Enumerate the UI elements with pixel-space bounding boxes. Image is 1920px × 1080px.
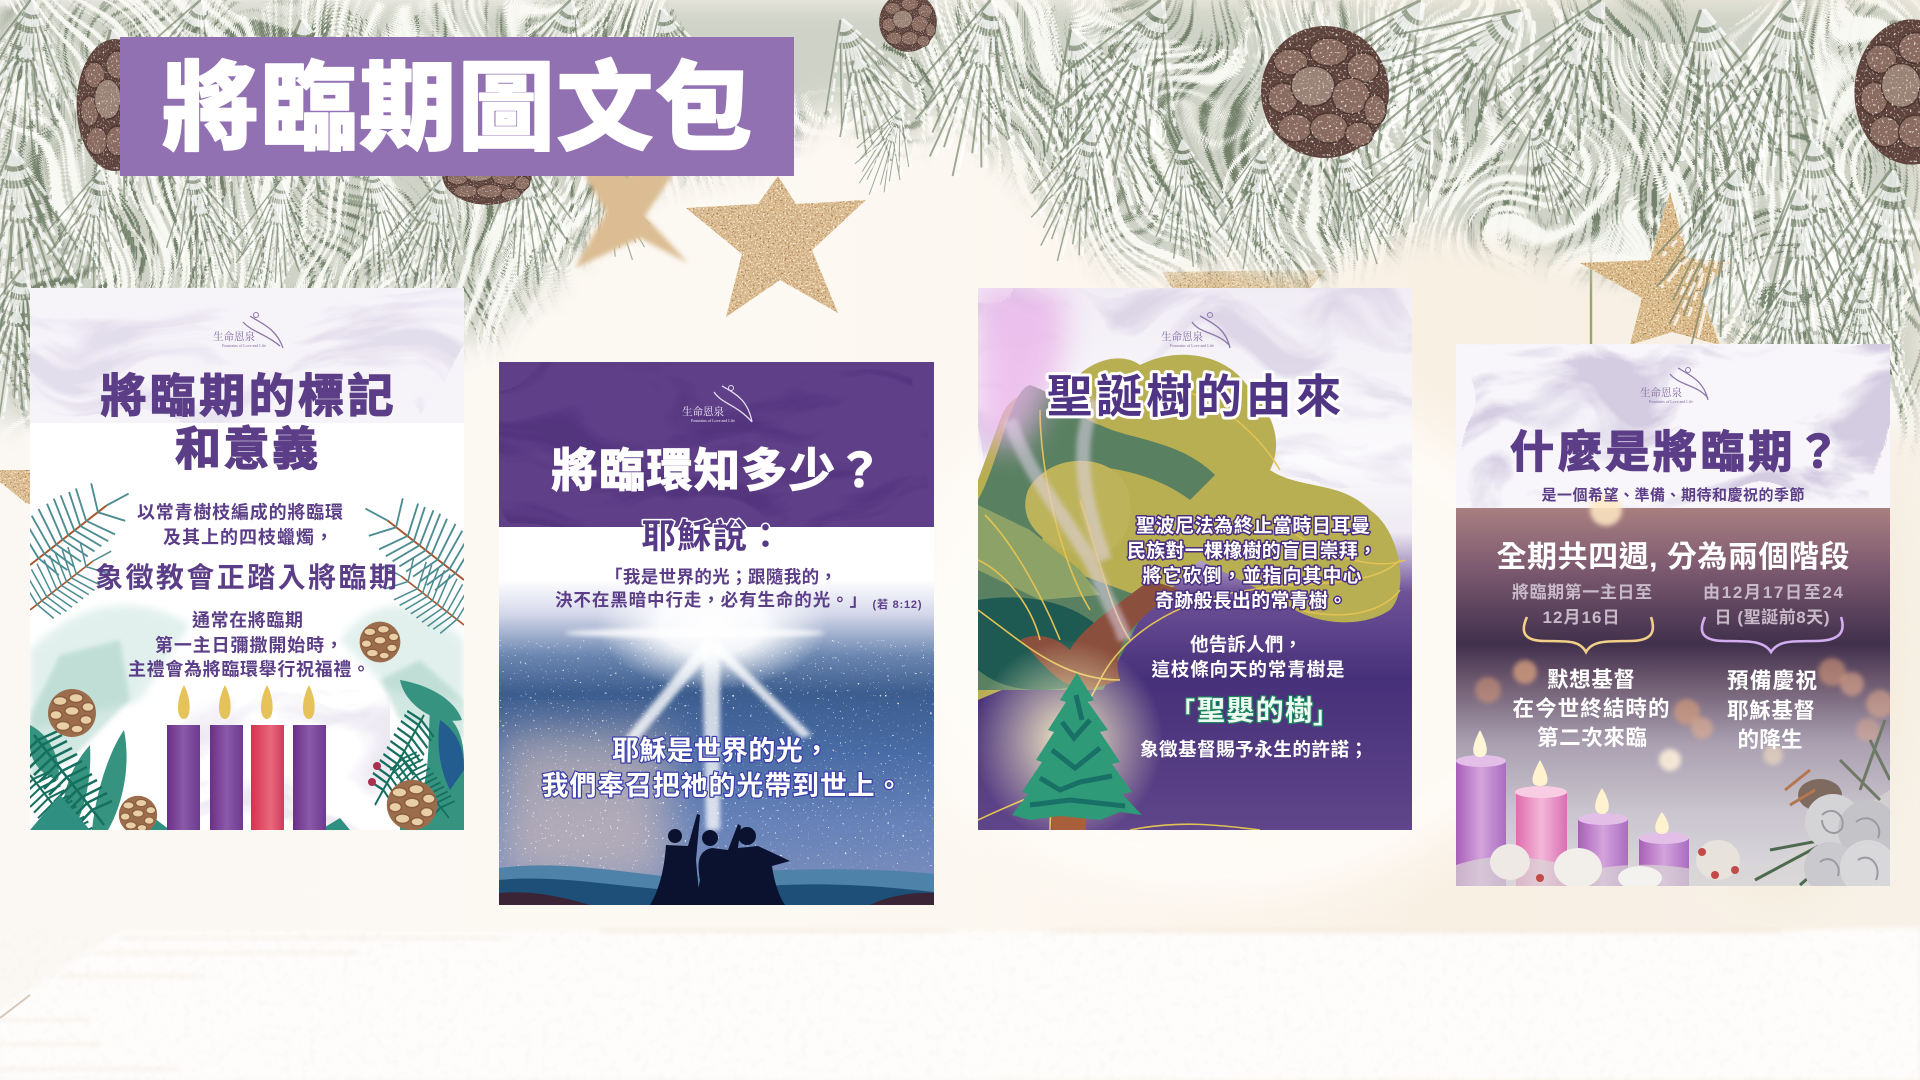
panel: card 3 christmas tree (973, 288, 1412, 840)
candle 4 (293, 685, 326, 830)
oak tree canopy (978, 355, 1405, 830)
title text: 將臨期圖文包 (162, 54, 752, 163)
logo: Fountains of Love and Life (1649, 399, 1693, 404)
candle 1 (167, 685, 200, 830)
logo (213, 312, 283, 348)
candle: purple medium (1578, 788, 1628, 886)
closing message: 我們奉召把祂的光帶到世上。 (542, 771, 902, 801)
heading: 和意義 (175, 423, 318, 475)
section heading: 全期共四週, 分為兩個階段 (1496, 541, 1850, 574)
phase 1 dates (1512, 582, 1652, 627)
candle: pink (1515, 760, 1567, 886)
text block: message: 他告訴人們， (1190, 634, 1302, 655)
text block 2: 主禮會為將臨環舉行祝福禮。 (128, 658, 370, 680)
heading: 將臨期的標記 (100, 370, 394, 422)
logo: Fountains of Love and Life (1170, 343, 1214, 348)
candle 2 (210, 685, 243, 830)
snowy table (0, 928, 1920, 1080)
frosted decorations (1456, 720, 1898, 896)
brace: purple (1702, 617, 1843, 652)
smoke swirl (978, 288, 1066, 450)
closing message (542, 736, 902, 801)
pine cone: right edge (1854, 19, 1920, 165)
candle: purple tall (1456, 730, 1506, 886)
highlight: holy tree: 」 (1313, 702, 1337, 729)
highlight: holy tree: 聖嬰的樹 (1197, 695, 1313, 726)
phase 1 meaning: 第二次來臨 (1537, 726, 1647, 750)
text block 2 (128, 610, 370, 680)
logo (1640, 368, 1708, 404)
star burst (565, 589, 826, 833)
evergreen branches (0, 0, 1920, 452)
text block: promise: 象徵基督賜予永生的許諾； (1140, 739, 1368, 760)
branches over right ornament (1638, 157, 1920, 421)
bokeh lights (1475, 494, 1894, 771)
subheading: 耶穌說： (642, 518, 782, 556)
text block: legend: 民族對一棵橡樹的盲目崇拜， (1127, 539, 1377, 562)
heading (100, 370, 394, 475)
text block 2: 通常在將臨期 (192, 610, 303, 630)
phase 2 dates (1703, 583, 1844, 627)
subheading: 是一個希望、準備、期待和慶祝的季節 (1542, 486, 1804, 504)
star: blurred hanging star (575, 160, 688, 268)
phase 1 meaning (1512, 668, 1670, 750)
star: behind third card (1162, 270, 1326, 300)
logo: 生命恩泉 (1640, 386, 1682, 399)
text block: legend: 聖波尼法為終止當時日耳曼 (1136, 515, 1370, 537)
string: gold ornament (1590, 190, 1592, 345)
verse: 「我是世界的光；跟隨我的， (605, 567, 837, 587)
closing message: 耶穌是世界的光， (612, 736, 830, 766)
text block: legend (1127, 515, 1377, 612)
text block 1: 以常青樹枝編成的將臨環 (137, 502, 343, 522)
star: right ornament (1580, 192, 1730, 345)
heading: 聖誕樹的由來 (1046, 370, 1342, 422)
highlight: holy tree: 「 (1171, 698, 1195, 725)
candle: purple small (1639, 812, 1689, 886)
text block: legend: 奇跡般長出的常青樹。 (1155, 590, 1347, 612)
verse: (若 8:12) (872, 597, 922, 611)
star: golden foreground star (686, 176, 866, 317)
logo: Fountains of Love and Life (691, 418, 735, 423)
verse (555, 567, 922, 611)
pine cone: below title (442, 145, 532, 205)
text block: message: 這枝條向天的常青樹是 (1152, 659, 1344, 680)
highlight: holy tree (1171, 695, 1337, 729)
evergreen tree (1012, 673, 1142, 835)
text block 2: 第一主日彌撒開始時， (155, 634, 343, 656)
text block 1: 及其上的四枝蠟燭， (163, 528, 333, 548)
phase 2 meaning: 的降生 (1738, 728, 1802, 752)
heading: 什麼是將臨期？ (1510, 428, 1840, 477)
logo: 生命恩泉 (213, 330, 256, 343)
panel: card 4 what is advent (1456, 344, 1898, 896)
title banner (120, 37, 794, 176)
logo (1161, 312, 1230, 348)
mountains (499, 865, 934, 892)
emphasis line: 象徵教會正踏入將臨期 (95, 562, 397, 593)
brace: gold (1524, 617, 1653, 652)
logo: 生命恩泉 (1161, 330, 1204, 343)
text block 1 (137, 502, 343, 548)
star: left edge (0, 470, 34, 506)
heading: 將臨環知多少？ (552, 444, 882, 496)
text block: message (1152, 634, 1344, 680)
phase 1 meaning: 默想基督 (1547, 668, 1635, 692)
phase 1 dates: 將臨期第一主日至 (1512, 582, 1652, 602)
candle 3 (251, 685, 284, 830)
phase 2 meaning: 耶穌基督 (1727, 699, 1815, 723)
silhouettes: three wise men (650, 814, 790, 905)
pine cone: large centre right (1261, 26, 1389, 158)
logo: Fountains of Love and Life (222, 343, 266, 348)
pine cone: behind title left (77, 39, 153, 171)
logo (682, 386, 752, 423)
phase 1 dates: 12月16日 (1542, 608, 1620, 627)
panel: card 2 advent wreath (499, 362, 934, 905)
phase 2 dates: 由12月17日至24 (1703, 583, 1844, 602)
text block: legend: 將它砍倒，並指向其中心 (1142, 564, 1362, 587)
phase 2 dates: 日 (聖誕前8天) (1714, 608, 1830, 627)
phase 2 meaning (1727, 669, 1817, 752)
panel: card 1 advent symbols (19, 288, 474, 849)
logo: 生命恩泉 (682, 405, 724, 418)
phase 2 meaning: 預備慶祝 (1727, 669, 1817, 693)
pine cone: top centre (879, 0, 937, 52)
verse: 決不在黑暗中行走，必有生命的光。」 (555, 590, 867, 610)
phase 1 meaning: 在今世終結時的 (1512, 696, 1670, 721)
